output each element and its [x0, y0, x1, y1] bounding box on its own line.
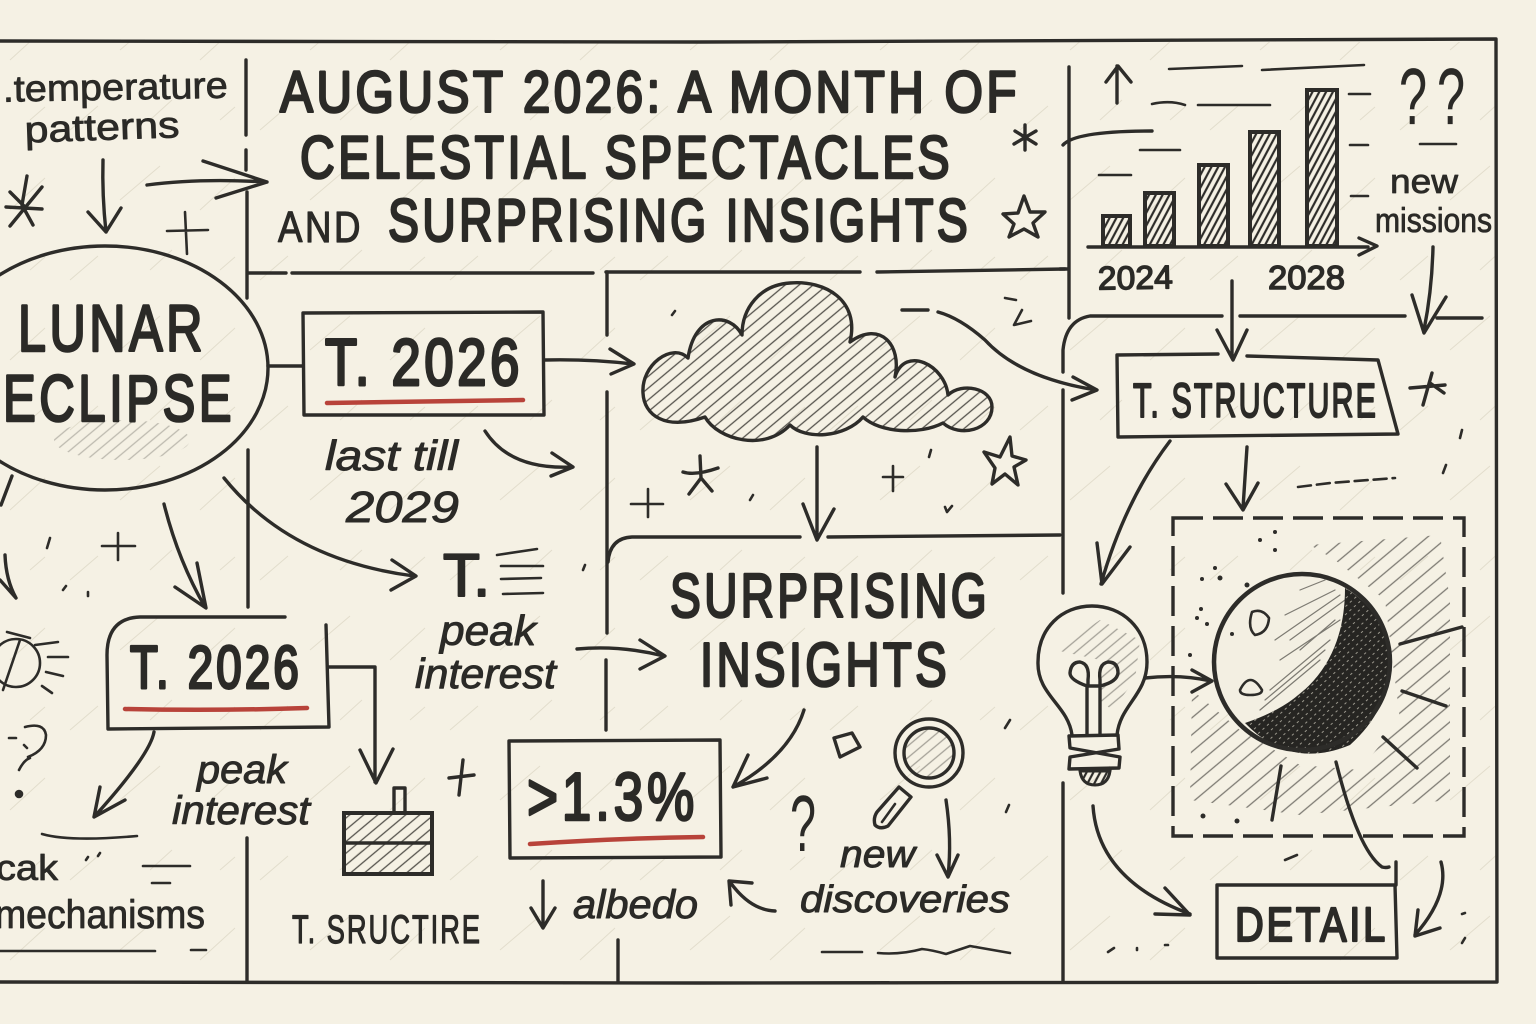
text: last till 2029: last till: [325, 432, 460, 479]
title: [278, 60, 1020, 254]
text: new missions: new: [1390, 163, 1458, 201]
text: peak interest middle: [415, 607, 558, 697]
text: last till 2029: 2029: [345, 483, 459, 532]
text: peak interest middle: peak: [438, 607, 538, 654]
arrow: patterns to title: [147, 161, 267, 198]
text: new discoveries: [800, 834, 1010, 954]
lunar eclipse bubble: LUNAR: [18, 291, 206, 365]
callout: detail: DETAIL: [1235, 899, 1388, 952]
text: temperature patterns: [2, 65, 228, 151]
text: new missions: [1375, 163, 1492, 240]
connector: moon to detail: [1336, 762, 1389, 868]
callout: detail: [1217, 862, 1397, 958]
callout: T. 2026 top: T. 2026: [325, 325, 523, 399]
panel: moon illustration: [1173, 518, 1464, 836]
question marks: [1399, 52, 1465, 141]
icon: partial bulb: [0, 632, 68, 693]
icon: plus near structure: [1410, 373, 1445, 405]
title: SURPRISING INSIGHTS: [388, 187, 971, 254]
arrow: bulb to moon: [1145, 670, 1212, 692]
lunar eclipse bubble: [0, 246, 268, 490]
icon: battery structure: [344, 788, 432, 874]
question marks: ?: [1399, 52, 1427, 141]
arrow: down to detail right: [1415, 862, 1443, 936]
icon: question mark and diamond: [790, 733, 860, 868]
arrow: box to battery: [329, 667, 393, 783]
heading: surprising insights: SURPRISING: [670, 562, 990, 631]
chart axis: [1088, 238, 1377, 255]
arrow: patterns down to eclipse: [88, 160, 121, 232]
arrow: new stuff from top to T. structure: [1217, 281, 1247, 360]
moon dots: [1188, 530, 1277, 824]
bars 2024 to 2028: [1103, 90, 1337, 246]
question marks: ?: [1437, 52, 1465, 141]
text: new discoveries: new: [840, 834, 918, 876]
icon: plus: [167, 212, 208, 254]
icon: stars around cloud: [631, 298, 1031, 517]
title: AUGUST 2026: A MONTH OF: [280, 60, 1020, 125]
panel: temperature patterns: [2, 65, 267, 254]
text: cak mechanisms: mechanisms: [0, 893, 205, 937]
text: new missions: missions: [1375, 202, 1492, 240]
callout: >1.3%: [509, 740, 721, 858]
arrow: cloud down: [803, 447, 834, 540]
heading: surprising insights: INSIGHTS: [700, 631, 950, 700]
chart sketch ticks: [1099, 65, 1370, 196]
text: albedo with arrow: [531, 881, 698, 928]
arrow: interest to surprising insights: [577, 640, 665, 669]
callout: T. 2026 top: [303, 312, 544, 415]
axis label: 2024: 2024: [1097, 258, 1173, 297]
title: CELESTIAL SPECTACLES: [300, 124, 953, 191]
icon: asterisk: [6, 176, 42, 226]
icon: plus and dots: [47, 533, 135, 596]
text: peak interest lower: peak: [196, 748, 289, 792]
icon: title stars: [1003, 125, 1045, 237]
connector: eclipse to T. 2026: [268, 364, 303, 368]
arrow: magnifier to discoveries: [937, 800, 958, 877]
moon background hatching: [1190, 535, 1450, 815]
axis label: 2028: 2028: [1268, 259, 1345, 296]
icon: small cross: [449, 760, 474, 795]
callout: >1.3%: >1.3%: [527, 759, 698, 835]
arrow: T. 2026 to cloud: [545, 349, 634, 374]
icon: cloud: [643, 283, 992, 440]
arrow: eclipse to T. 2026 lower: [164, 504, 206, 608]
arrow: eclipse left down: [0, 476, 16, 598]
text: last till 2029: [325, 432, 460, 532]
callout: T. structure: [1117, 354, 1398, 437]
arrow: discoveries to albedo: [729, 881, 775, 911]
text: temperature patterns: .temperature: [2, 65, 228, 110]
sketch dashes: [1298, 478, 1395, 487]
icon: light bulb: [1038, 606, 1147, 785]
moon rays: [1272, 627, 1462, 820]
text: temperature patterns: patterns: [24, 104, 180, 151]
text: new discoveries: discoveries: [800, 879, 1010, 921]
arrow: eclipse to T. peak: [224, 478, 416, 590]
moon: [1214, 574, 1390, 754]
callout: T. 2026 lower: [107, 617, 329, 729]
arrow: structure to moon panel: [1226, 447, 1258, 510]
label: T. with lines: T.: [443, 542, 490, 609]
label: T. with lines: [443, 542, 543, 609]
text: peak interest lower: [172, 748, 312, 833]
title: AND: [278, 203, 363, 252]
arrow: last till curve: [485, 431, 573, 476]
text: albedo with arrow: albedo: [573, 883, 698, 927]
icon: magnifying glass: [874, 719, 963, 828]
label: T. SRUCTIRE: T. SRUCTIRE: [292, 908, 482, 952]
arrow: structure to bulb: [1097, 441, 1170, 584]
arrow: missions down: [1412, 247, 1446, 333]
icon: partial question marks: [9, 726, 46, 797]
arrow: bulb to detail: [1093, 806, 1190, 915]
icon: question mark and diamond: ?: [790, 779, 816, 868]
heading: surprising insights: [670, 562, 990, 700]
lunar eclipse bubble: ECLIPSE: [3, 361, 235, 435]
arrow: insights to stat: [733, 710, 804, 787]
arrow: box down left: [94, 732, 154, 817]
callout: T. structure: T. STRUCTURE: [1133, 375, 1378, 428]
arrow: up: [1106, 66, 1131, 103]
sketch marks: [583, 565, 1465, 952]
text: cak mechanisms: [0, 834, 206, 951]
chart: new missions bar chart: [1088, 52, 1492, 333]
arrow: cloud to T. structure: [902, 310, 1097, 400]
text: peak interest lower: interest: [172, 789, 312, 833]
text: peak interest middle: interest: [415, 650, 558, 697]
callout: T. 2026 lower: T. 2026: [130, 634, 302, 701]
